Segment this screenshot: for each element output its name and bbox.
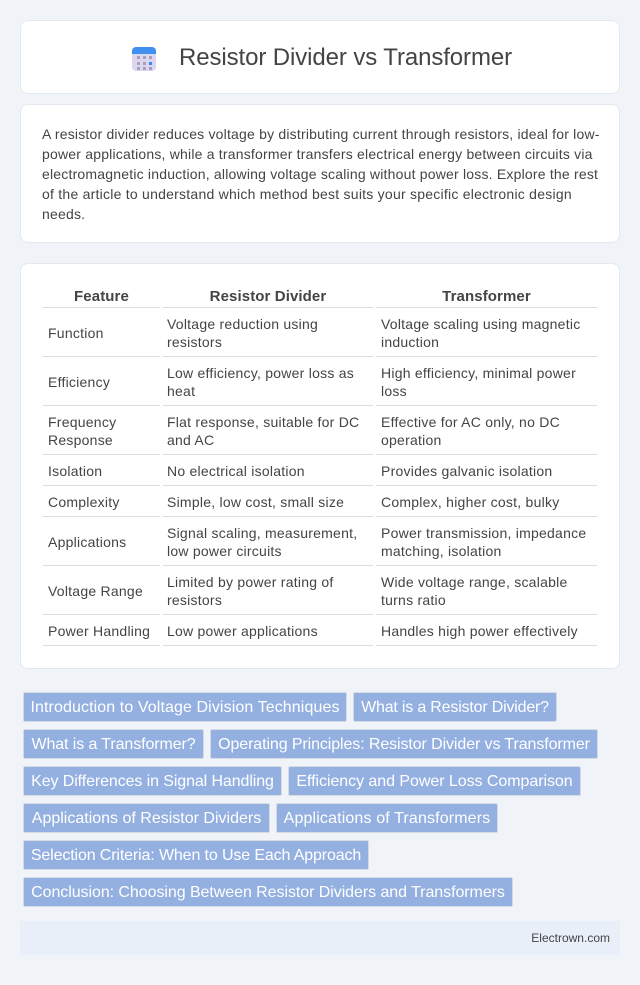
row: function (48, 316, 580, 350)
table card (20, 263, 620, 669)
row: efficiency: Low efficiency, power loss as (167, 365, 354, 381)
row: function: resistors (167, 334, 222, 350)
intro text: A resistor divider reduces voltage by distributing current through resistors, ideal for low- (42, 126, 600, 142)
tag: Selection Criteria: When to Use Each Approach (31, 847, 361, 864)
row: power handling: Low power applications (167, 623, 318, 639)
row: complexity: Complexity (48, 494, 120, 510)
tag: Introduction to Voltage Division Techniques (30, 699, 340, 716)
header row: Transformer (442, 288, 531, 305)
tag: What is a Resistor Divider? (361, 699, 549, 716)
tag: Key Differences in Signal Handling (31, 773, 274, 790)
row: complexity: Simple, low cost, small size (167, 494, 344, 510)
row: voltage range (48, 574, 568, 608)
row: function: induction (381, 334, 439, 350)
footer bar (20, 921, 620, 955)
row: isolation: No electrical isolation (167, 463, 305, 479)
tag (23, 803, 270, 833)
icon: calendar (132, 47, 156, 71)
header row: Resistor Divider (210, 288, 326, 305)
intro text: of the article to understand which method best suits your specific electronic design (42, 186, 572, 202)
intro text: needs. (42, 206, 85, 222)
tag: Conclusion: Choosing Between Resistor Dividers and Transformers (31, 884, 505, 901)
row: applications (48, 525, 586, 559)
title: Resistor Divider vs Transformer (179, 44, 512, 71)
tag: Applications of Resistor Dividers (32, 810, 261, 827)
tag (276, 803, 498, 833)
row: power handling: Power Handling (48, 623, 150, 639)
row: function: Voltage reduction using (167, 316, 318, 332)
row: voltage range: Wide voltage range, scalable (381, 574, 568, 590)
row: efficiency: heat (167, 383, 195, 399)
row: isolation (48, 463, 552, 479)
row: voltage range: turns ratio (381, 592, 446, 608)
tag (353, 692, 557, 722)
row: isolation: Isolation (48, 463, 102, 479)
row: function: Voltage scaling using magnetic (381, 316, 580, 332)
row: voltage range: Voltage Range (48, 583, 143, 599)
row: function: Function (48, 325, 104, 341)
header row: Feature (74, 288, 129, 305)
row: frequency response: Flat response, suitable for DC (167, 414, 359, 430)
row: frequency response: Effective for AC only, no DC (381, 414, 560, 430)
footer credit: Electrown.com (531, 931, 610, 945)
row: isolation: Provides galvanic isolation (381, 463, 552, 479)
header row (74, 288, 531, 305)
title card (20, 20, 620, 94)
row: complexity (48, 494, 560, 510)
row: efficiency: loss (381, 383, 407, 399)
tag (23, 729, 204, 759)
comparison table (43, 288, 597, 646)
row: efficiency: High efficiency, minimal power (381, 365, 576, 381)
row: frequency response (48, 414, 560, 448)
row: efficiency (48, 365, 576, 399)
row: frequency response: and AC (167, 432, 214, 448)
intro card (20, 104, 620, 243)
tag (23, 877, 513, 907)
tag: Operating Principles: Resistor Divider vs Transformer (218, 736, 590, 753)
row: voltage range: resistors (167, 592, 222, 608)
tag (23, 692, 347, 722)
tag (210, 729, 598, 759)
tag: What is a Transformer? (31, 736, 196, 753)
topic tags (23, 692, 598, 907)
intro text (42, 126, 600, 222)
row: power handling (48, 623, 578, 639)
intro text: electromagnetic induction, allowing voltage scaling without power loss. Explore the rest (42, 166, 598, 182)
tag (23, 840, 369, 870)
tag (288, 766, 581, 796)
row: applications: Applications (48, 534, 126, 550)
intro text: power applications, while a transformer transfers electrical energy between circuits via (42, 146, 593, 162)
row: applications: matching, isolation (381, 543, 502, 559)
row: frequency response: operation (381, 432, 442, 448)
row: applications: Power transmission, impedance (381, 525, 586, 541)
tag: Efficiency and Power Loss Comparison (296, 773, 573, 790)
tag: Applications of Transformers (284, 810, 490, 827)
row: frequency response: Frequency (48, 414, 116, 430)
row: frequency response: Response (48, 432, 113, 448)
row: applications: low power circuits (167, 543, 282, 559)
row: efficiency: Efficiency (48, 374, 110, 390)
tag (23, 766, 282, 796)
row: voltage range: Limited by power rating of (167, 574, 334, 590)
row: applications: Signal scaling, measurement, (167, 525, 357, 541)
row: complexity: Complex, higher cost, bulky (381, 494, 559, 510)
row: power handling: Handles high power effectively (381, 623, 578, 639)
